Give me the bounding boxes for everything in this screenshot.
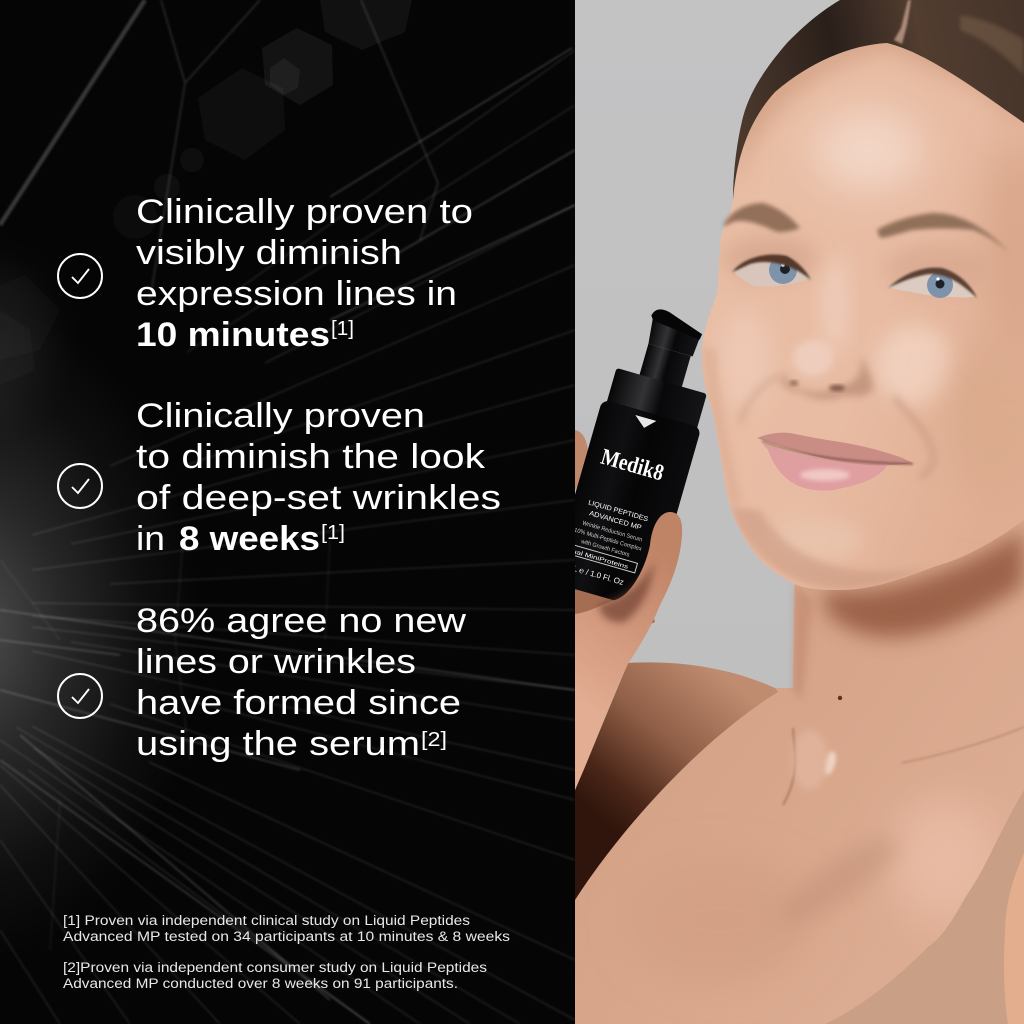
bottle label: Dual MiniProteins	[566, 547, 629, 571]
serum bottle	[575, 309, 706, 600]
text: benefit 1: expression lines in	[136, 275, 457, 313]
right temple shade	[984, 153, 1024, 326]
text: benefit 3: have formed since	[136, 684, 461, 722]
forehead highlight	[813, 110, 923, 190]
bottle label: 10% Multi-Peptide Complex	[573, 528, 642, 553]
text: benefit 2: to diminish the look	[136, 438, 486, 476]
face	[702, 20, 1024, 590]
benefit 2	[58, 397, 501, 558]
text: benefit 3: using the serum	[136, 725, 420, 763]
icon: check circle 3	[58, 674, 102, 718]
benefit 1	[58, 193, 473, 354]
soft upper-left glow	[0, 275, 40, 402]
hand and thumb	[575, 512, 682, 790]
left panel: black background with light rays	[0, 0, 575, 1024]
bottle label: Medik8	[598, 444, 667, 485]
forehead top shade	[738, 43, 1014, 168]
bokeh hexagons	[0, 0, 412, 385]
cheek highlights	[720, 316, 772, 404]
text: benefit 3: lines or wrinkles	[136, 643, 416, 681]
text: benefit 3: 86% agree no new	[136, 602, 467, 640]
benefit 3	[58, 602, 467, 763]
far shoulder in shadow	[575, 662, 778, 900]
eyebrows	[723, 203, 800, 232]
footnotes: Advanced MP tested on 34 participants at 10 minutes & 8 weeks	[63, 929, 510, 944]
text: benefit 1: 10 minutes	[136, 316, 330, 354]
hair parting	[894, 0, 911, 44]
eye right	[888, 268, 977, 298]
bottle label: Wrinkle Reduction Serum	[581, 521, 643, 544]
icon: check circle 1	[58, 254, 102, 298]
pump head	[648, 310, 699, 356]
hair highlights	[960, 15, 1024, 75]
chin glow and jaw shade	[788, 523, 858, 558]
fingertip behind bottle	[575, 430, 588, 490]
text: benefit 3	[136, 602, 467, 763]
text: benefit 2: of deep-set wrinkles	[136, 479, 501, 517]
hair	[733, 0, 1024, 200]
skin right of bra strap	[1004, 853, 1024, 1024]
text: benefit 1: Clinically proven to	[136, 193, 473, 231]
icon: check circle 2	[58, 464, 102, 508]
smile folds	[740, 376, 778, 423]
text: benefit 2: [1]	[321, 522, 345, 544]
eye left	[732, 255, 811, 287]
footnotes: Advanced MP conducted over 8 weeks on 91 participants.	[63, 976, 458, 991]
bra cup	[825, 790, 1024, 1024]
web lines	[0, 0, 440, 712]
text: benefit 1	[136, 193, 473, 354]
brighter rays	[0, 48, 575, 1024]
footnotes: [1] Proven via independent clinical study on Liquid Peptides	[63, 913, 470, 928]
text: benefit 2: Clinically proven	[136, 397, 425, 435]
palm behind bottle	[575, 589, 655, 624]
eye socket shade	[722, 236, 818, 280]
light rays	[0, 50, 575, 1024]
footnotes: [2]Proven via independent consumer study on Liquid Peptides	[63, 960, 487, 975]
text: benefit 3: [2]	[421, 729, 447, 751]
footnotes	[63, 913, 510, 991]
text: benefit 2: in	[136, 520, 165, 558]
bottle label: LIQUID PEPTIDES	[587, 500, 649, 523]
bottle label	[575, 448, 664, 585]
nose bridge highlight	[823, 255, 847, 355]
text: benefit 2	[136, 397, 501, 558]
nose	[781, 340, 873, 399]
text: benefit 2: 8 weeks	[179, 520, 320, 558]
thumb shadow	[598, 560, 655, 623]
bottle label: 30mL ℮ / 1.0 Fl. Oz	[557, 560, 625, 587]
bottle label: with Growth Factors	[579, 539, 630, 559]
lips	[757, 433, 913, 491]
photo panel: woman holding serum bottle	[549, 0, 1024, 1024]
neck mole	[838, 696, 842, 700]
text: benefit 1: visibly diminish	[136, 234, 402, 272]
body, neck and chest	[575, 520, 1024, 1024]
bottle label: ADVANCED MP	[588, 510, 643, 532]
text: benefit 1: [1]	[331, 318, 354, 340]
